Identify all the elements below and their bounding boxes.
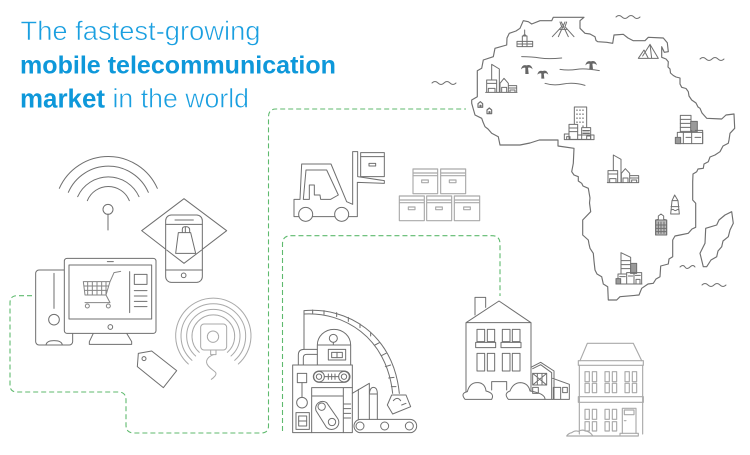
map of Africa	[472, 17, 735, 300]
dashed connector: factory to house	[282, 236, 500, 431]
icon: forklift	[294, 152, 384, 221]
icon: price tag	[137, 351, 177, 388]
robotic arm	[304, 310, 411, 414]
icon: desktop computer with cart	[36, 258, 156, 345]
title: in the world	[112, 84, 249, 114]
icon: grid tower	[656, 214, 667, 235]
desert dunes	[522, 57, 599, 85]
map icons south	[607, 155, 679, 284]
icon: high-rise group centre	[564, 107, 594, 140]
title	[20, 16, 336, 114]
machine body	[293, 365, 352, 433]
icon: palm trees	[521, 61, 597, 79]
devices group	[36, 157, 251, 388]
title: market	[20, 86, 106, 114]
robot head	[298, 329, 351, 365]
icon: mosque	[517, 30, 533, 47]
icon: high-rise group south	[616, 253, 642, 284]
barn	[531, 362, 569, 399]
mainland outline	[472, 17, 735, 300]
icon: NFC reader	[176, 298, 251, 379]
icon: large house and barn	[463, 297, 569, 399]
icon: lighthouse	[671, 195, 679, 214]
sidebar	[130, 272, 147, 313]
Madagascar	[700, 212, 733, 267]
icon: high-rise group east	[675, 115, 703, 144]
icon: factory town central	[607, 155, 639, 183]
title: mobile telecommunication	[20, 52, 336, 80]
sea waves	[432, 16, 726, 286]
icon: robot factory	[293, 310, 417, 433]
icon: huts	[478, 102, 492, 114]
map icons north	[478, 22, 703, 144]
icon: wifi antenna	[59, 157, 157, 230]
icon: pyramids	[638, 44, 658, 58]
icon: phone with shopping bag	[142, 199, 227, 282]
icon: monument	[552, 22, 574, 37]
cart	[83, 271, 121, 308]
icon: factory town west	[486, 64, 517, 92]
icon: townhouse	[567, 343, 643, 436]
conveyor	[352, 383, 417, 433]
dashed connector: devices to map	[10, 109, 466, 433]
stacked boxes	[399, 169, 480, 221]
title: The fastest-growing	[20, 16, 260, 46]
